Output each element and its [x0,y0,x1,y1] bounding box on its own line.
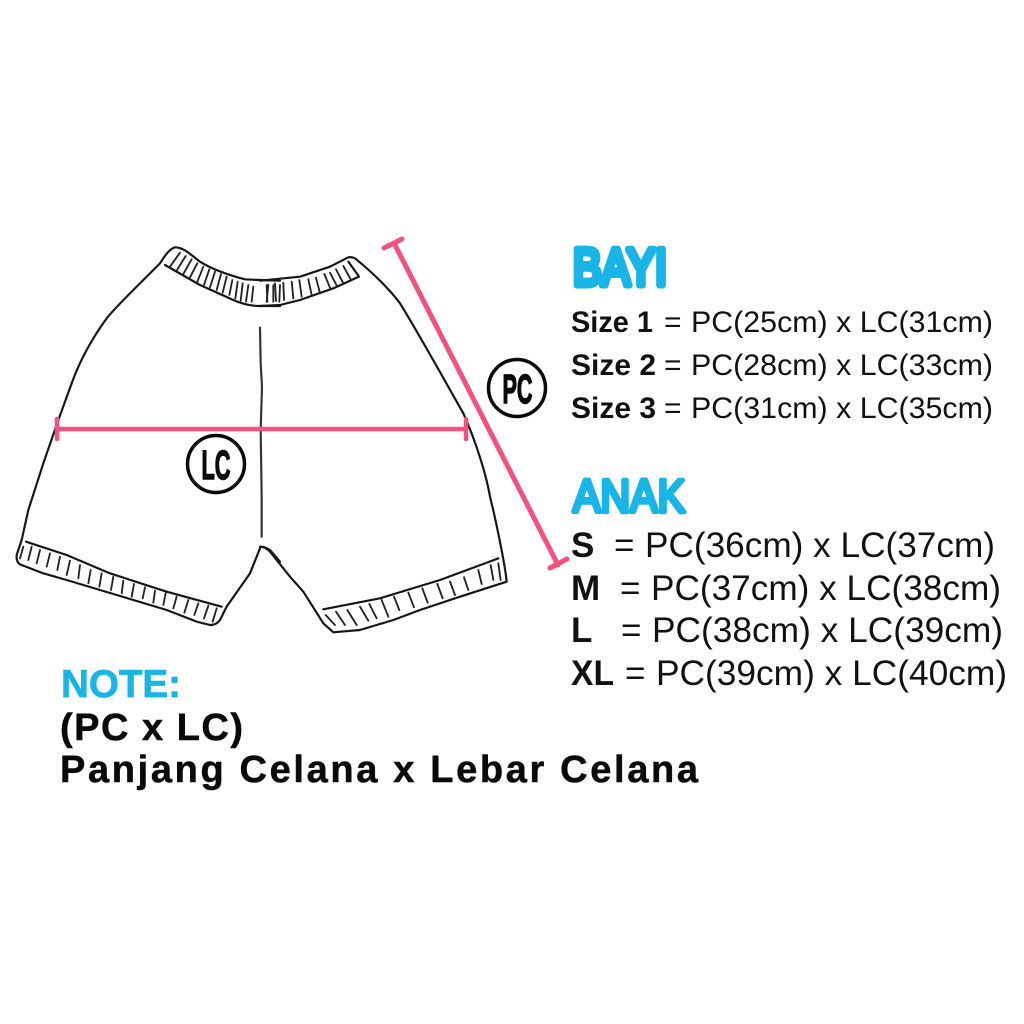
Size 2 row: PC(28cm) x LC(33cm) [691,349,993,382]
size list: BAYI [571,306,993,425]
S row: = [614,526,634,565]
M row: PC(37cm) x LC(38cm) [651,569,1001,608]
note abbreviation: (PC x LC) [60,707,243,749]
LC badge [188,436,244,492]
LC badge: LC [202,442,230,488]
PC badge: PC [502,366,532,412]
left leg of shorts [17,247,280,625]
XL row: XL [571,654,614,693]
XL row: PC(39cm) x LC(40cm) [656,654,1007,693]
L row: = [621,611,641,650]
Size 3 row: PC(31cm) x LC(35cm) [691,392,993,425]
Size 2 row: = [664,349,682,382]
note block [60,663,699,791]
Size 2 row: Size 2 [571,349,656,382]
LC width measure line [57,419,466,439]
S row: S [571,526,594,565]
PC length measure line [384,239,567,568]
note heading: NOTE: [61,663,181,706]
Size 3 row: = [664,392,682,425]
note explanation: Panjang Celana x Lebar Celana [60,749,699,791]
heading: ANAK: ANAK [573,470,685,522]
M row: M [571,569,600,608]
size list: ANAK [571,526,1007,693]
L row: PC(38cm) x LC(39cm) [652,611,1003,650]
S row: PC(36cm) x LC(37cm) [645,526,995,565]
Size 1 row: = [664,306,682,339]
Size 1 row: PC(25cm) x LC(31cm) [691,306,993,339]
right leg of shorts [260,257,507,632]
Size 3 row: Size 3 [571,392,656,425]
Size 1 row: Size 1 [571,306,653,339]
shorts illustration [17,247,507,632]
heading: BAYI: BAYI [573,239,667,297]
M row: = [620,569,640,608]
L row: L [571,611,592,650]
PC badge [488,360,546,416]
XL row: = [625,654,645,693]
